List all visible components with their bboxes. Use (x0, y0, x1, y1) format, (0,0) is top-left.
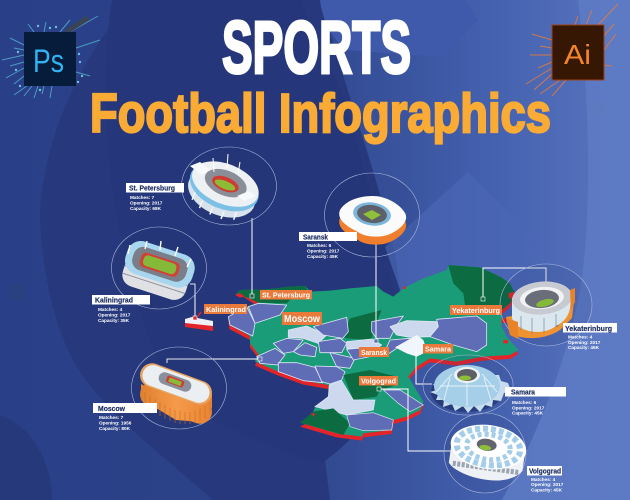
panel: Volgograd stadium: Volgograd (529, 468, 561, 476)
map tag: Moscow: Moscow (284, 314, 320, 325)
details: Samara: Opening: 2017 (512, 405, 545, 410)
details: Volgograd: Opening: 2017 (531, 482, 564, 487)
details: St. Petersburg: Matches: 7 (130, 195, 154, 200)
region: St. Petersburg oblast (235, 286, 308, 303)
connector lines (167, 218, 546, 451)
panel: Moscow stadium (93, 347, 226, 431)
regions: purple oblasts (228, 303, 487, 384)
map tag: Kaliningrad: Kaliningrad (206, 307, 246, 314)
details: St. Petersburg: Opening: 2017 (130, 200, 163, 206)
label: Samara (505, 387, 566, 396)
panel: St. Petersburg stadium (126, 147, 276, 229)
stadium: Kaliningrad (117, 237, 198, 304)
stadium: Saransk (339, 196, 406, 245)
region: Caucasus (347, 413, 393, 431)
panel: Saransk stadium: Saransk (303, 234, 328, 242)
map green base (228, 265, 518, 437)
icon: Illustrator logo (526, 4, 618, 96)
panel: Saransk stadium (299, 173, 420, 259)
region: coastal red spots (235, 286, 514, 417)
region: Volgograd dark (343, 370, 397, 400)
panel: Kaliningrad stadium (92, 227, 206, 323)
region: south light (315, 381, 375, 415)
map tag: Samara: Samara (425, 346, 451, 354)
details: Yekaterinburg: Capacity: 45K (568, 345, 600, 350)
details: Kaliningrad: Opening: 2017 (98, 312, 131, 318)
panel: Yekaterinburg stadium (500, 264, 617, 350)
map tag: Kaliningrad (204, 304, 247, 314)
map tag: Saransk: Saransk (361, 350, 387, 357)
stadium: Moscow (137, 360, 215, 427)
label: Volgograd (527, 466, 562, 476)
details: Kaliningrad: Matches: 4 (98, 307, 122, 312)
panel: Samara stadium (423, 355, 566, 416)
icon: Kaliningrad ship on map (185, 312, 213, 331)
label: Yekaterinburg (563, 323, 617, 332)
region: central dark (343, 310, 382, 340)
region: Krasnodar dark (300, 408, 350, 435)
region: Samara white (395, 335, 427, 357)
details: Saransk: Opening: 2017 (307, 248, 340, 254)
map tag: Samara (423, 344, 453, 354)
stadium: Yekaterinburg (506, 279, 575, 339)
label: Moscow (93, 403, 157, 413)
details: St. Petersburg: Capacity: 68K (130, 206, 162, 211)
stadium: Samara (430, 365, 511, 413)
map red extrusion (228, 269, 518, 441)
map of host regions (228, 265, 518, 441)
region: Ural (448, 265, 515, 310)
map tag: Yekaterinburg: Yekaterinburg (452, 308, 500, 315)
map tag: Saransk (359, 347, 389, 357)
map tag: Volgograd (359, 376, 398, 386)
label: Saransk (299, 232, 357, 241)
map pins (193, 294, 485, 391)
stadium: St. Petersburg (179, 152, 266, 229)
icon: Illustrator logo: Ai (564, 39, 591, 70)
panel: Volgograd stadium (444, 413, 564, 493)
details: Moscow: Matches: 7 (99, 415, 123, 420)
details: Moscow: Capacity: 80K (99, 426, 131, 431)
details: Moscow: Opening: 1956 (99, 420, 132, 426)
details: Saransk: Capacity: 45K (307, 254, 339, 259)
panel: Moscow stadium: Moscow (98, 406, 126, 413)
panel: Kaliningrad stadium: Kaliningrad (95, 298, 133, 304)
details: Volgograd: Capacity: 45K (531, 487, 563, 492)
panel: Samara stadium: Samara (511, 390, 535, 396)
label: Kaliningrad (92, 295, 150, 304)
details: Yekaterinburg: Matches: 4 (568, 334, 592, 340)
label: St. Petersburg (126, 183, 184, 192)
region: Astrakhan (383, 390, 423, 412)
stadium: Volgograd (446, 420, 529, 485)
icon: Photoshop logo: Ps (33, 43, 64, 79)
map tag: Volgograd: Volgograd (361, 378, 396, 386)
details: Samara: Matches: 6 (512, 400, 536, 405)
icon: Photoshop logo (2, 16, 100, 98)
details: Kaliningrad: Capacity: 35K (98, 318, 130, 323)
map tag: Yekaterinburg (450, 305, 502, 315)
details: Saransk: Matches: 6 (307, 243, 331, 248)
details: Samara: Capacity: 45K (512, 411, 544, 416)
details: Yekaterinburg: Opening: 2017 (568, 340, 601, 345)
map tag: St. Petersburg: St. Petersburg (262, 292, 310, 300)
title: SPORTS: SPORTS (222, 6, 411, 89)
panel: St. Petersburg stadium: St. Petersburg (129, 186, 175, 192)
details: Volgograd: Matches: 4 (531, 477, 555, 482)
panel: Yekaterinburg stadium: Yekaterinburg (565, 326, 612, 333)
map tag: St. Petersburg (260, 290, 312, 300)
